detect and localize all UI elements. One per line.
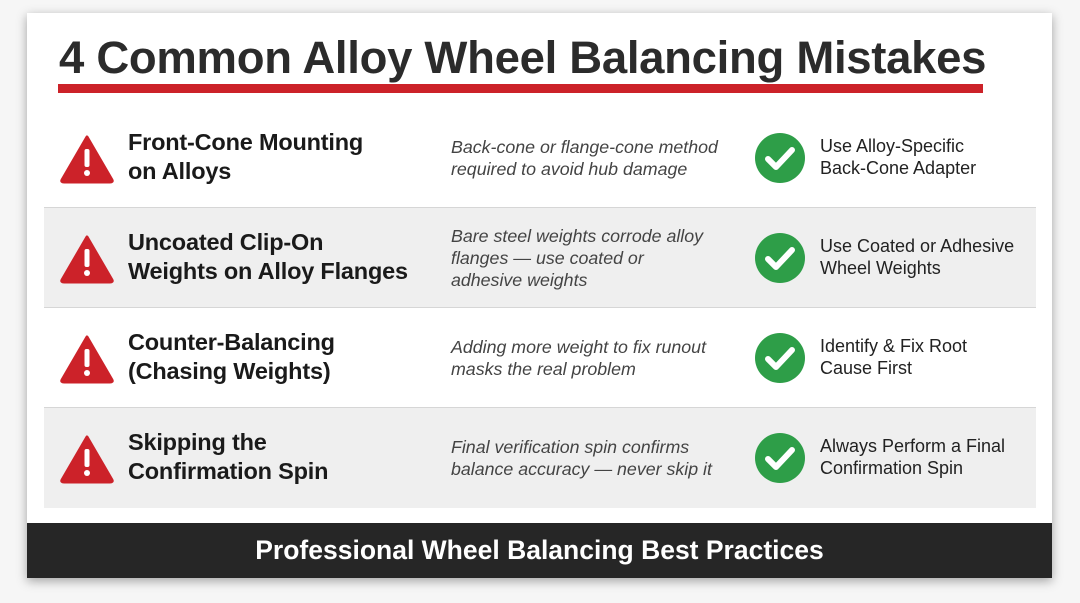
description: flanges — use coated or (451, 248, 644, 268)
solution: Identify & Fix Root (820, 336, 967, 356)
description (450, 337, 707, 379)
description: Back-cone or flange-cone method (451, 137, 718, 157)
solution: Cause First (820, 358, 912, 378)
row 3 (44, 308, 1036, 408)
title: 4 Common Alloy Wheel Balancing Mistakes (59, 32, 986, 83)
description: adhesive weights (451, 270, 587, 290)
footer banner: Professional Wheel Balancing Best Practices (255, 535, 824, 565)
mistake heading (128, 329, 335, 384)
solution: Back-Cone Adapter (820, 158, 976, 178)
solution: Confirmation Spin (820, 458, 963, 478)
description (451, 226, 704, 290)
mistake heading: (Chasing Weights) (128, 358, 330, 384)
icon: check (755, 433, 805, 483)
solution (820, 236, 1014, 278)
solution (820, 336, 967, 378)
icon: warning (60, 235, 114, 284)
mistake heading: Uncoated Clip-On (128, 229, 323, 255)
row 2 (44, 208, 1036, 308)
mistake heading: Skipping the (128, 429, 267, 455)
mistake heading: Counter-Balancing (128, 329, 335, 355)
description: Adding more weight to fix runout (451, 337, 706, 357)
icon: check (755, 133, 805, 183)
solution (820, 436, 1005, 478)
icon: warning (60, 335, 114, 384)
description: required to avoid hub damage (451, 159, 687, 179)
mistake heading: Confirmation Spin (128, 458, 328, 484)
description: Final verification spin confirms (451, 437, 689, 457)
description: Bare steel weights corrode alloy (451, 226, 703, 246)
solution: Use Alloy-Specific (820, 136, 964, 156)
icon: check (755, 233, 805, 283)
row 1 (44, 108, 1036, 208)
solution: Always Perform a Final (820, 436, 1005, 456)
mistake heading: Front-Cone Mounting (128, 129, 363, 155)
mistake heading (128, 429, 328, 484)
description (451, 137, 718, 179)
icon: check (755, 333, 805, 383)
mistake heading: Weights on Alloy Flanges (128, 258, 408, 284)
solution: Use Coated or Adhesive (820, 236, 1014, 256)
description (451, 437, 712, 479)
description: balance accuracy — never skip it (451, 459, 712, 479)
mistake heading: on Alloys (128, 158, 231, 184)
mistake heading (128, 129, 363, 184)
description: masks the real problem (451, 359, 636, 379)
icon: warning (60, 435, 114, 484)
mistake heading (128, 229, 408, 284)
row 4 (44, 408, 1036, 508)
solution: Wheel Weights (820, 258, 941, 278)
icon: warning (60, 135, 114, 184)
title underline (58, 84, 983, 93)
solution (820, 136, 976, 178)
footer banner (27, 523, 1052, 578)
